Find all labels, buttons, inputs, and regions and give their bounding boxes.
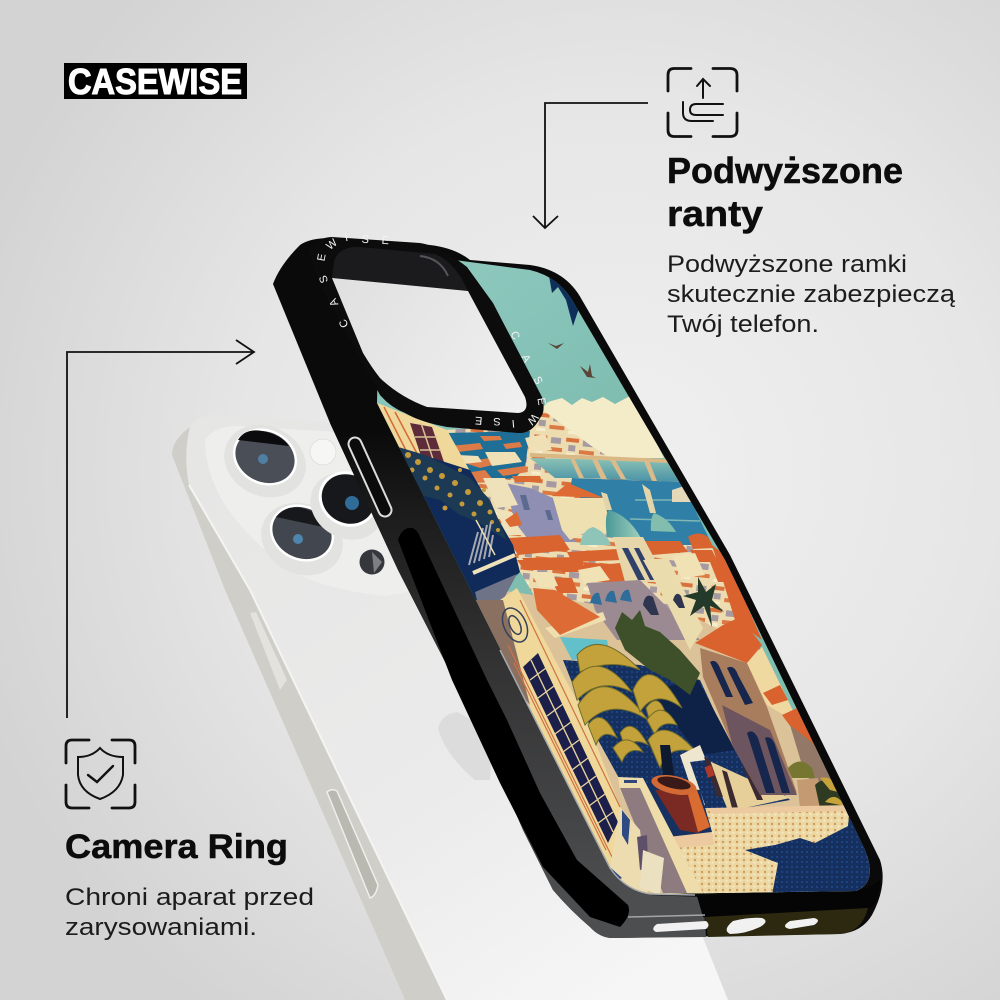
top facade window [410,423,444,462]
flash [310,439,336,465]
volume button [250,612,287,690]
camera plate [205,426,420,596]
window strip [523,653,618,843]
rubble block [640,850,664,895]
ring lettering: C [337,317,351,329]
plaza ledges [668,805,850,848]
ring outer [308,237,544,433]
text: raised edges description: skutecznie zabezpieczą [667,281,956,308]
balcony ledge [473,555,515,573]
far right tan wall [790,725,845,810]
terrace wall shadow face [620,788,687,893]
balcony navy block [398,447,520,612]
ring lettering: E [475,414,483,426]
building lower shadow [722,705,797,795]
case artwork [370,250,890,910]
phone side edge [172,427,447,1000]
heading: raised edges: Podwyższone [667,150,903,191]
art bezel highlight [500,650,695,895]
big red roof [695,617,762,663]
camera window [332,278,526,413]
ring lettering: E [534,397,548,406]
deep shadow [650,680,735,755]
railing post [476,520,495,555]
ring lettering: S [531,375,545,387]
ring lettering: I [344,232,349,244]
lens 3 [298,459,396,553]
top facade stripes [383,406,418,453]
brown building [700,648,797,793]
left bay roofs [450,436,528,483]
icon: shield [66,740,135,808]
lavender building [505,483,577,542]
dark palm [615,610,700,695]
sky [370,250,890,910]
lit pavement [707,760,790,808]
small roofs on right [763,685,820,750]
inner planter navy [640,785,712,837]
lower arches [747,731,790,793]
ring lettering [315,232,548,429]
left bay cream houses [458,434,552,466]
shrub [788,762,815,778]
small teal building [560,637,610,660]
sea stripes [630,500,700,521]
text: raised edges description [667,251,956,338]
lower left rubble [610,807,648,895]
white stone post [680,745,706,808]
water under bridge [530,458,682,482]
ring lettering: I [511,417,515,429]
church wall [587,580,700,640]
clouds [540,396,664,458]
phone body [172,415,728,1000]
foliage [398,447,507,540]
bottom olive band [705,908,868,937]
large arches [643,594,685,615]
side button [327,790,378,898]
birds [548,343,596,378]
left top facade [377,403,470,470]
cathedral front [613,537,656,582]
boat [672,486,692,502]
ornate scroll [497,604,533,646]
edge highlight [189,485,447,1000]
terrace block [618,777,704,895]
navy shadow bottom right [745,807,885,895]
dome lanterns [601,484,656,513]
top window grid [415,423,441,458]
side button [355,444,385,510]
people [704,757,763,808]
right orange wall [712,545,762,640]
cathedral front arches [622,548,656,580]
text: camera ring description: Chroni aparat przed [65,884,314,911]
city base [446,410,760,650]
left bay [447,431,530,482]
text: camera ring description [65,884,314,941]
lower highlight line [628,915,705,917]
text: camera ring description: zarysowaniami. [65,914,257,941]
person red shirt [704,765,715,778]
ring lettering: W [324,236,340,253]
flower pot [650,771,710,833]
small roof [505,476,542,527]
cream houses by lavender [483,478,522,535]
arrow: top, to raised edges [533,103,648,228]
ring lettering: E [381,235,389,247]
window grid [530,660,613,832]
cream houses lower [530,553,705,588]
ring inner wall [332,247,468,291]
ring lettering: A [519,353,533,365]
bridge deck [530,453,669,463]
lens 2 [249,490,355,588]
main cream facade [500,588,640,870]
white phone behind [172,412,728,1000]
translucent side band [330,403,706,938]
bottom black band [697,880,880,917]
low wall block [797,778,822,808]
lens 1 [212,412,318,510]
navy plaza [563,660,790,808]
shrub dark [815,780,848,808]
ring lettering: S [361,234,369,246]
lidar sensor [360,550,384,574]
heading: raised edges [667,150,903,234]
ring lettering: E [315,253,329,262]
case shell [273,238,883,938]
heading: raised edges: ranty [667,193,763,234]
upper windows [710,661,753,705]
logo: CASEWISE [68,61,242,102]
apple logo [438,712,492,780]
phone case [273,238,883,938]
ring lettering: A [327,296,341,308]
ring lettering: C [507,329,522,342]
big roof centre [552,483,604,498]
rubble shadow [637,835,648,870]
light wall right [747,647,800,725]
leaves top right [549,278,578,326]
sea [570,478,712,545]
ring lettering: W [524,411,540,427]
ornament frieze [475,574,517,613]
railing bars [469,522,493,565]
bridge piers [570,458,657,481]
foliage leaves [405,452,500,532]
rubble navy accents [611,810,630,880]
roof eave [545,612,606,638]
terrace block inset [624,780,637,783]
orange roof rows [507,534,735,593]
wall arches [590,590,632,605]
text: raised edges description: Podwyższone ramki [667,251,907,278]
arrow: left, to camera ring [67,340,254,718]
brown wall [472,600,530,705]
cream tower [643,558,703,650]
lavender shadow windows [520,495,553,520]
cream block under big roof [553,498,612,540]
gold palm [572,644,697,768]
icon: raised edges [668,68,737,136]
roof near facade [533,588,600,635]
ring lettering: S [493,415,501,427]
speaker cutouts [653,918,818,934]
red facade stripes [508,600,620,857]
heading: camera ring: Camera Ring [65,828,288,866]
palm trunk [660,745,675,785]
domes [580,527,611,545]
camera ring [308,232,548,433]
cobble plaza [672,807,850,895]
wall highlight [420,256,448,276]
ring lettering: S [317,274,331,285]
upper palm [683,577,724,627]
shrub gold [820,778,845,806]
lower art base [500,590,890,900]
inner black slot [398,528,629,927]
text: raised edges description: Twój telefon. [667,311,819,338]
